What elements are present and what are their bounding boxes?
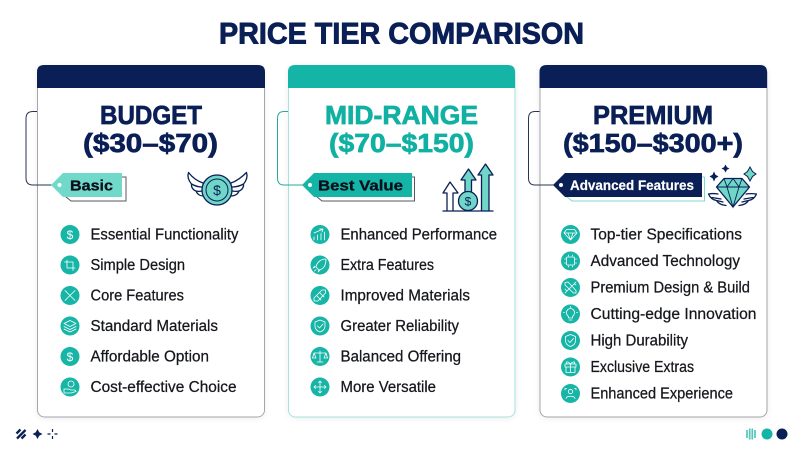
heading: mid-range xyxy=(325,100,478,158)
item: premium design and build: Premium Design & Build xyxy=(590,280,750,296)
icon: winged coin xyxy=(188,172,247,205)
card header: premium xyxy=(540,65,767,88)
item: essential functionality: Essential Functionality xyxy=(90,226,239,244)
panel: budget xyxy=(26,65,265,417)
item: simple design xyxy=(60,256,185,274)
card: budget xyxy=(38,66,264,417)
heading: budget: ($30–$70) xyxy=(83,128,218,158)
item: simple design: Simple Design xyxy=(90,257,185,274)
tag: advanced features: Advanced Features xyxy=(570,177,694,193)
item: exclusive extras xyxy=(561,358,694,376)
item: more versatile xyxy=(310,378,436,396)
item: affordable option: $ xyxy=(67,350,74,364)
item: cutting-edge innovation: Cutting-edge Innovation xyxy=(590,306,756,323)
item: greater reliability xyxy=(310,316,459,336)
heading: budget: BUDGET xyxy=(100,100,202,130)
heading: premium xyxy=(563,100,743,158)
footer decoration: right dots xyxy=(747,428,788,440)
card header: budget xyxy=(37,65,265,88)
list: premium features xyxy=(561,225,756,403)
item: core features xyxy=(60,286,184,305)
item: balanced offering: Balanced Offering xyxy=(340,348,461,366)
card: mid-range xyxy=(288,66,515,417)
footer decoration: left icons xyxy=(16,429,58,439)
icon: rising arrows with coin xyxy=(443,164,493,211)
heading: mid-range: MID-RANGE xyxy=(325,100,478,130)
item: enhanced experience: Enhanced Experience xyxy=(590,386,733,402)
item: extra features xyxy=(310,256,434,274)
list: budget features xyxy=(60,225,239,396)
connector: budget tag xyxy=(26,112,52,185)
heading: budget xyxy=(83,100,218,158)
card header: mid-range xyxy=(288,65,515,88)
title: PRICE TIER COMPARISON xyxy=(219,18,584,50)
item: exclusive extras: Exclusive Extras xyxy=(590,359,694,376)
connector: premium tag xyxy=(528,112,554,185)
item: improved materials: Improved Materials xyxy=(340,288,470,304)
connector: mid-range tag xyxy=(278,112,303,185)
icon: winged diamond xyxy=(708,164,756,207)
item: top-tier specifications: Top-tier Specifications xyxy=(590,226,742,244)
tag: advanced features xyxy=(553,173,704,201)
icon: winged coin: $ xyxy=(213,182,221,198)
item: standard materials: Standard Materials xyxy=(90,318,218,335)
icon: rising arrows with coin: $ xyxy=(465,194,472,208)
item: enhanced performance: Enhanced Performance xyxy=(340,226,497,244)
item: essential functionality: $ xyxy=(67,228,74,242)
card: premium xyxy=(540,66,767,417)
item: high durability: High Durability xyxy=(590,332,688,350)
heading: mid-range: ($70–$150) xyxy=(329,128,474,158)
item: more versatile: More Versatile xyxy=(340,379,436,396)
item: cost-effective choice: Cost-effective Choice xyxy=(90,379,236,396)
item: advanced technology: Advanced Technology xyxy=(590,253,740,270)
item: greater reliability: Greater Reliability xyxy=(340,318,459,335)
item: core features: Core Features xyxy=(90,288,184,304)
item: affordable option: Affordable Option xyxy=(90,348,209,366)
heading: premium: ($150–$300+) xyxy=(563,128,743,158)
item: extra features: Extra Features xyxy=(340,257,434,274)
tag: basic: Basic xyxy=(70,178,113,194)
panel: mid-range xyxy=(278,65,515,417)
heading: premium: PREMIUM xyxy=(593,100,713,130)
tag: best value xyxy=(302,173,414,201)
panel: premium xyxy=(528,65,767,417)
list: mid-range features xyxy=(310,225,497,396)
tag: best value: Best Value xyxy=(318,178,403,194)
item: high durability xyxy=(561,331,688,350)
tag: basic xyxy=(51,173,126,201)
